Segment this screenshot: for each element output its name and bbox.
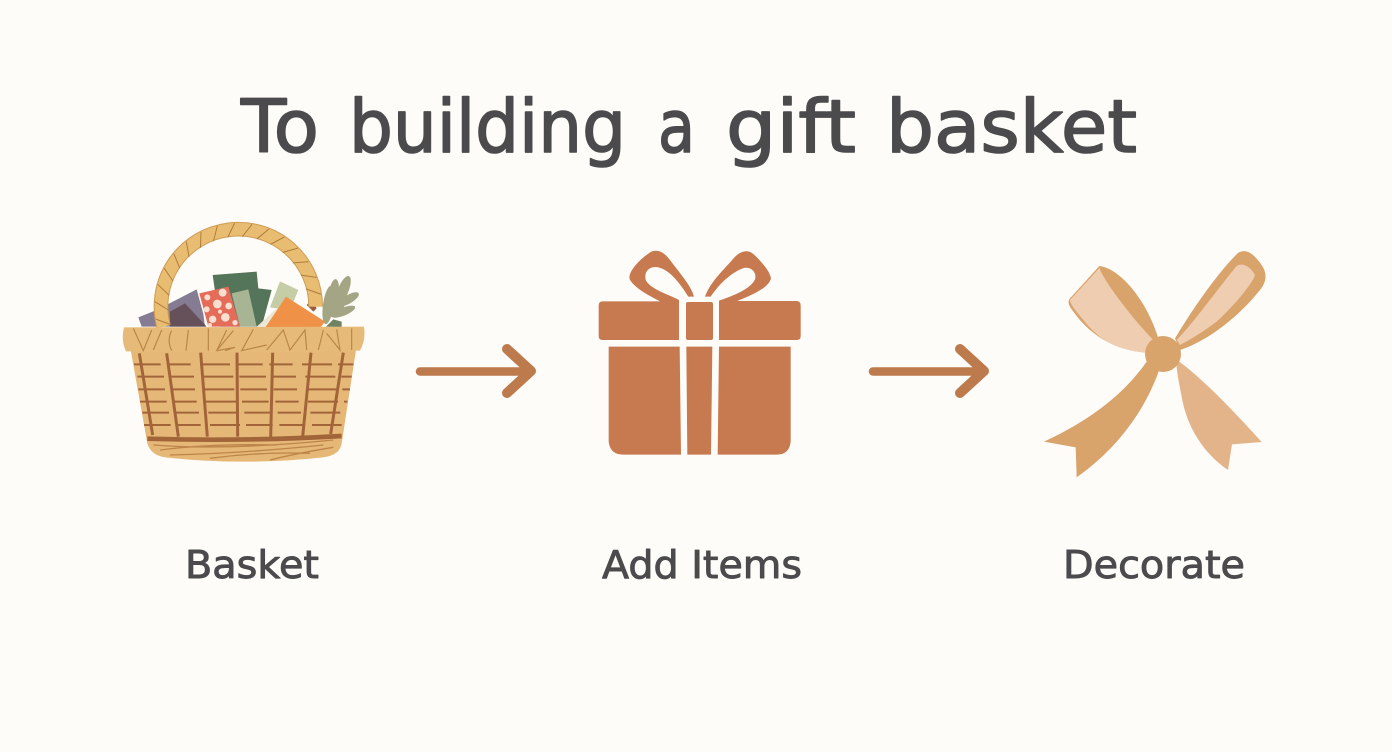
title: building [349, 85, 626, 170]
arrow: basket to add items [420, 349, 531, 393]
box body [609, 347, 681, 455]
arrow: add items to decorate [873, 349, 984, 393]
left loop [1069, 266, 1158, 353]
basket contents [138, 272, 361, 328]
label: Basket: Basket [185, 543, 319, 587]
basket rim [123, 327, 364, 353]
icon: gift box [599, 251, 801, 455]
left tail [1044, 362, 1159, 477]
title: To [240, 85, 319, 170]
icon: ribbon bow [1044, 251, 1265, 477]
icon: wicker basket with gifts [123, 223, 364, 462]
basket handle [155, 223, 321, 327]
label: Decorate: Decorate [1063, 543, 1245, 587]
right loop [1175, 251, 1265, 350]
leaves [320, 274, 361, 325]
title: a [658, 85, 695, 170]
box lid [599, 251, 694, 340]
label: Add Items: Add Items [602, 543, 802, 587]
title: basket [886, 85, 1137, 170]
basket body [131, 350, 356, 462]
patterned wrap [204, 289, 238, 327]
weave [134, 353, 353, 460]
knot [1145, 336, 1181, 372]
title: gift [726, 85, 856, 170]
title [240, 85, 1137, 170]
right tail [1176, 359, 1262, 470]
